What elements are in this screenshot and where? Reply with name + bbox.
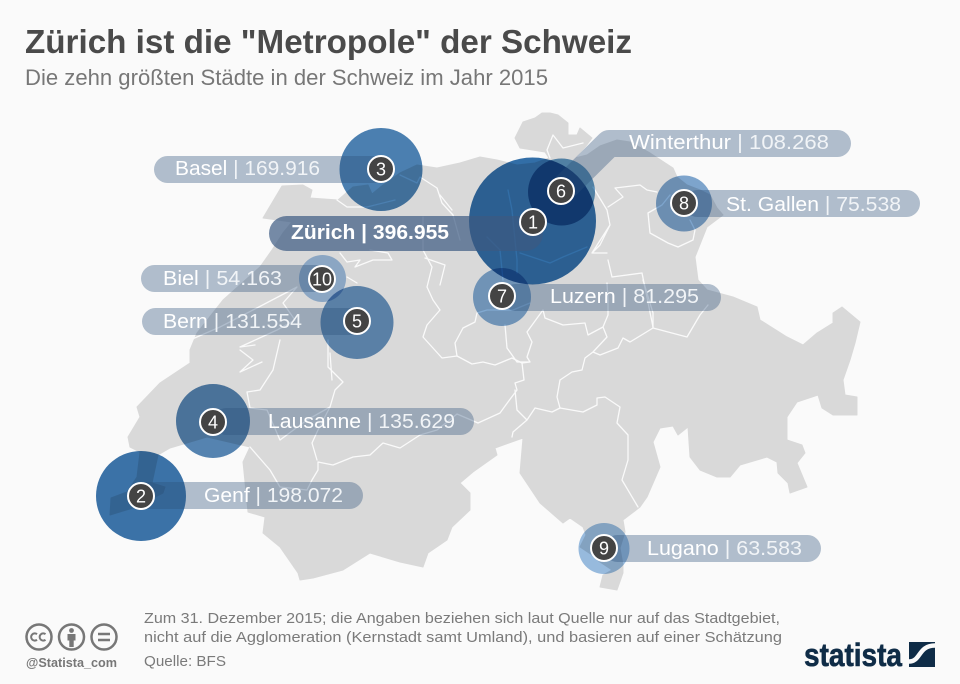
marker 1: 1 xyxy=(528,212,538,232)
title: Zürich ist die "Metropole" der Schweiz xyxy=(25,23,632,60)
footnote: nicht auf die Agglomeration (Kernstadt samt Umland), und basieren auf einer Schätzung xyxy=(144,629,782,646)
marker 6: 6 xyxy=(556,182,566,202)
icon: no derivatives xyxy=(92,624,116,650)
credit handle: @Statista_com xyxy=(26,656,117,670)
bubble: St. Gallen xyxy=(656,176,712,232)
bubble: Zürich xyxy=(469,158,596,284)
marker 3 xyxy=(368,156,394,182)
label: Biel xyxy=(141,265,335,292)
marker 4 xyxy=(200,409,226,435)
label: Winterthur xyxy=(561,132,838,191)
label: Biel: Biel | 54.163 xyxy=(163,268,282,290)
icon: attribution xyxy=(59,624,84,650)
icons: creative commons xyxy=(26,624,116,650)
marker 7: 7 xyxy=(497,286,507,306)
label: Genf: Genf | 198.072 xyxy=(204,485,343,507)
label: Winterthur: Winterthur | 108.268 xyxy=(629,132,829,154)
label: Zürich xyxy=(269,216,543,251)
marker 1 xyxy=(520,209,546,235)
icon: cc xyxy=(26,624,52,650)
marker 9 xyxy=(591,535,617,561)
marker 10: 10 xyxy=(312,270,332,290)
label: St. Gallen xyxy=(684,190,920,217)
bubble: Luzern xyxy=(473,268,531,326)
marker 8 xyxy=(671,190,697,216)
map of Switzerland xyxy=(110,113,860,590)
source: Quelle: BFS xyxy=(144,653,226,670)
subtitle: Die zehn größten Städte in der Schweiz im Jahr 2015 xyxy=(25,65,548,90)
marker 6 xyxy=(548,178,574,204)
marker 2 xyxy=(128,483,154,509)
marker 4: 4 xyxy=(208,412,218,432)
marker 9: 9 xyxy=(599,538,609,558)
label: Basel xyxy=(154,156,395,183)
marker 3: 3 xyxy=(376,160,386,180)
marker 2: 2 xyxy=(136,486,146,506)
bubble: Genf xyxy=(96,451,186,541)
label: Luzern xyxy=(502,284,721,311)
label: Lugano xyxy=(604,535,821,562)
label: Lugano: Lugano | 63.583 xyxy=(647,538,802,560)
bubble: Bern xyxy=(320,286,394,359)
marker 8: 8 xyxy=(679,194,689,214)
bubbles: population circles xyxy=(96,128,712,574)
bubble: Winterthur xyxy=(528,158,595,226)
label: Luzern: Luzern | 81.295 xyxy=(550,286,699,308)
footnote xyxy=(144,610,782,670)
bubble: Biel xyxy=(299,255,346,302)
city labels xyxy=(128,132,920,562)
statista logo: statista xyxy=(804,637,902,673)
label: Basel: Basel | 169.916 xyxy=(175,158,320,180)
footnote: Zum 31. Dezember 2015; die Angaben beziehen sich laut Quelle nur auf das Stadtgebiet, xyxy=(144,610,780,627)
label: Bern xyxy=(142,308,370,335)
marker 5 xyxy=(344,308,370,334)
bubble: Lugano xyxy=(578,523,630,574)
label: Genf xyxy=(128,482,363,509)
label: Lausanne xyxy=(213,408,474,435)
bubble: Basel xyxy=(340,128,422,211)
label: Bern: Bern | 131.554 xyxy=(163,311,302,333)
label: St. Gallen: St. Gallen | 75.538 xyxy=(726,194,901,216)
marker 10 xyxy=(309,266,335,292)
bubble: Lausanne xyxy=(176,384,250,458)
label: Zürich: Zürich | 396.955 xyxy=(291,221,449,244)
rank markers xyxy=(128,156,697,561)
label: Lausanne: Lausanne | 135.629 xyxy=(268,411,455,433)
marker 5: 5 xyxy=(352,312,362,332)
marker 7 xyxy=(489,283,515,309)
